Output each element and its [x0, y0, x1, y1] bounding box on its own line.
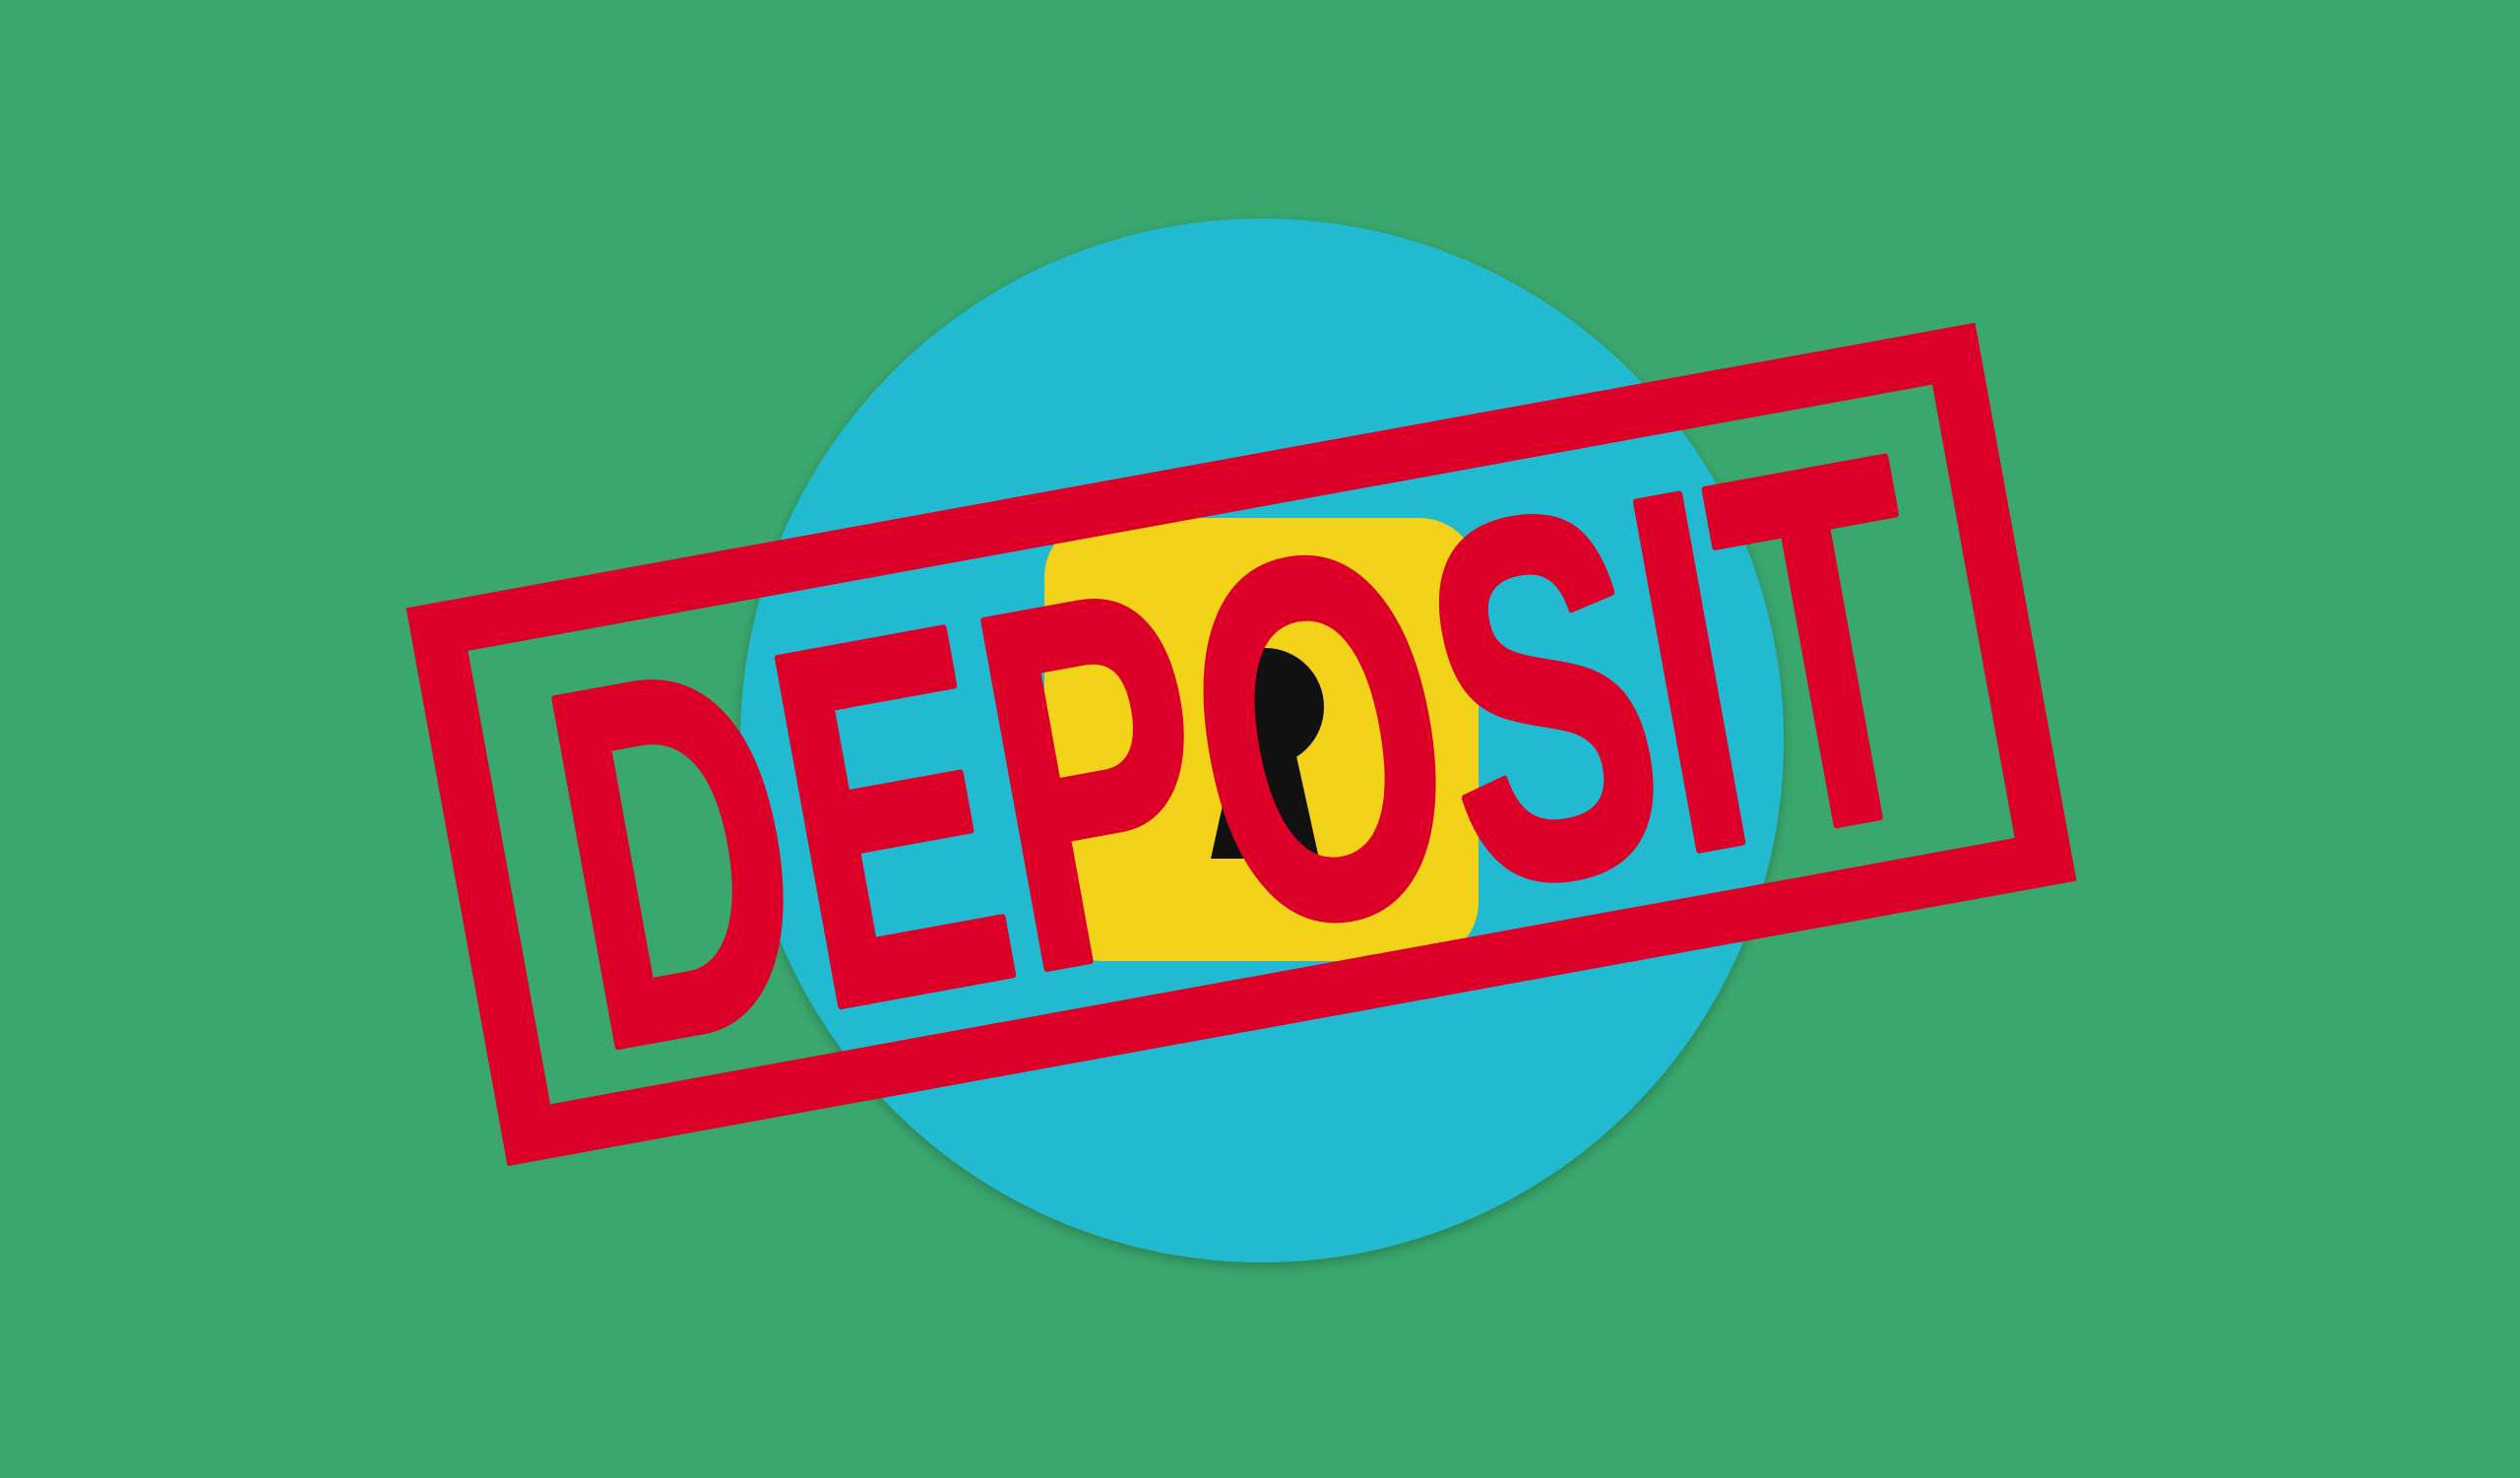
icon: yellow lock plate — [1044, 518, 1479, 961]
icon: blue circle — [740, 219, 1784, 1262]
icon: keyhole — [1206, 648, 1324, 859]
